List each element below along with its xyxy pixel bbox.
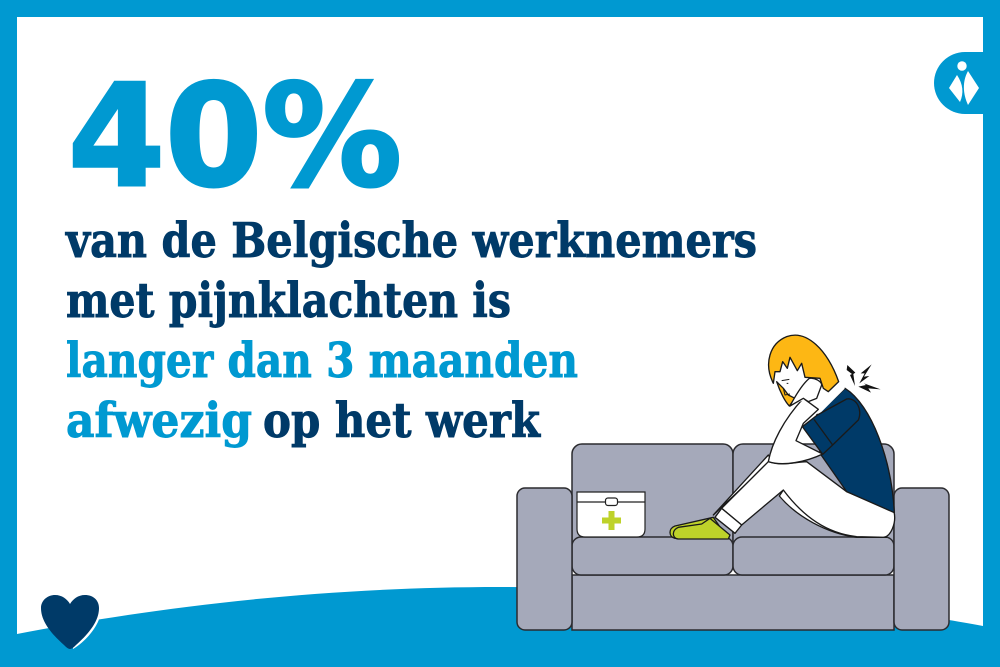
headline line 1: van de Belgische werknemers — [65, 213, 757, 269]
trousers — [722, 462, 895, 537]
pain bolts — [847, 364, 881, 393]
face — [775, 373, 812, 406]
icon: heart — [41, 595, 101, 649]
logo badge — [934, 52, 983, 114]
headline line 4 — [66, 393, 542, 449]
t-shirt sleeve — [802, 399, 860, 454]
neck — [808, 383, 845, 415]
sofa base — [572, 575, 894, 630]
hand — [790, 378, 822, 406]
sofa seat cushions — [572, 537, 894, 575]
far foot — [670, 517, 727, 538]
beard — [777, 382, 795, 406]
big number: 40%: 40% — [68, 55, 402, 219]
arm — [768, 398, 823, 464]
eye and nose — [782, 379, 790, 395]
sleeve hem — [814, 419, 833, 445]
hair — [769, 335, 839, 392]
sofa back cushions — [572, 444, 894, 554]
near foot — [673, 518, 730, 539]
headline line 4: afwezig — [66, 393, 252, 449]
sofa arm left — [517, 488, 572, 630]
icon: first aid kit — [577, 492, 645, 537]
illustration: person in pain — [670, 335, 895, 539]
headline line 4: op het werk — [263, 393, 542, 449]
trouser cuff — [715, 508, 742, 533]
sofa arm right — [894, 488, 949, 630]
headline line 3: langer dan 3 maanden — [66, 333, 578, 389]
headline line 2: met pijnklachten is — [66, 273, 511, 329]
back leg — [713, 455, 772, 515]
t-shirt body — [817, 388, 894, 513]
illustration: sofa — [517, 444, 949, 630]
trouser underside strip — [779, 490, 887, 537]
